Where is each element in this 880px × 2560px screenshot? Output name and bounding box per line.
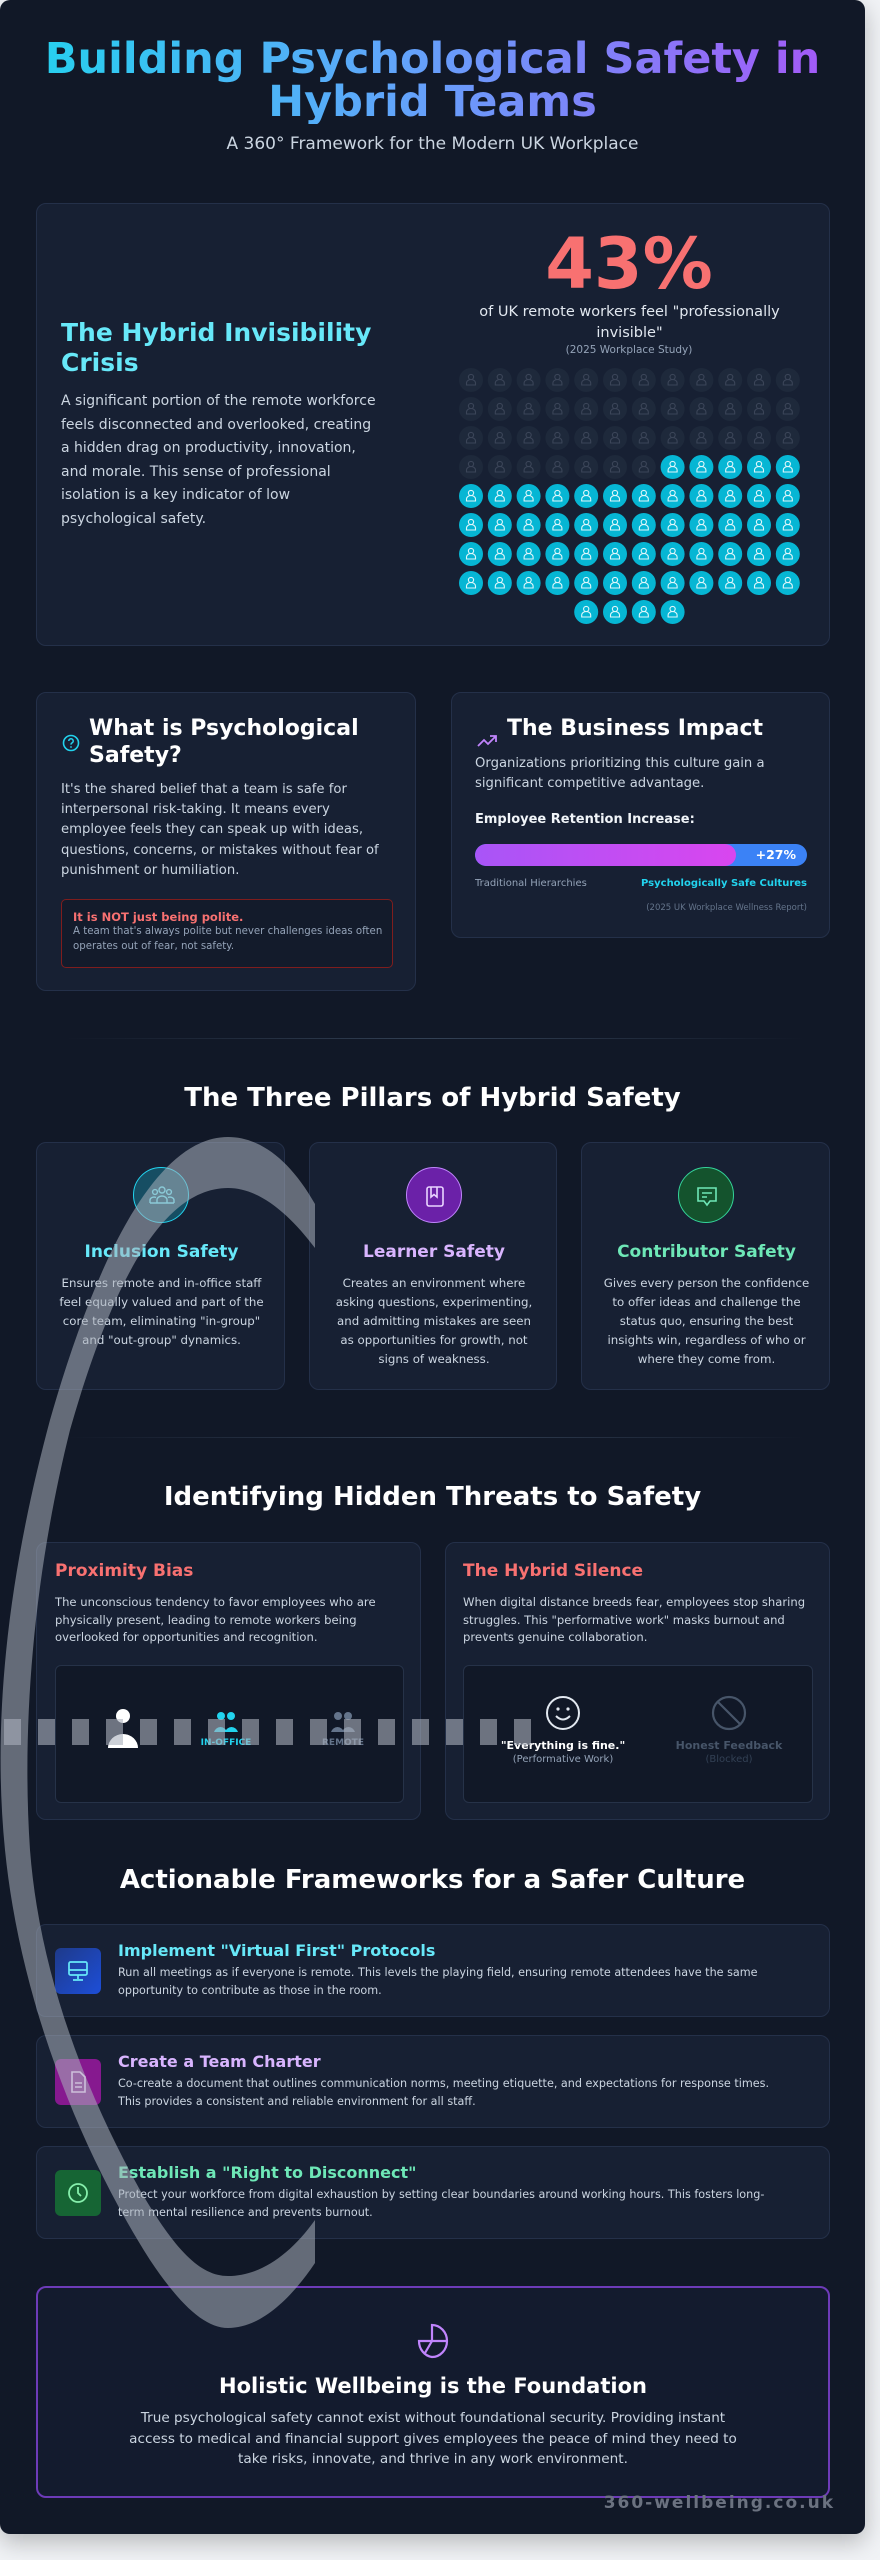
- bar labels: Psychologically Safe Cultures: [641, 878, 807, 889]
- text: True psychological safety cannot exist without foundational security. Providing instant: [141, 2410, 725, 2426]
- icon: blocked: Honest Feedback: [676, 1739, 782, 1752]
- heading: hidden threats: Identifying Hidden Threats to Safety: [164, 1482, 701, 1512]
- bar labels: [474, 878, 807, 889]
- stat: 43%: 43%: [545, 223, 713, 305]
- subtitle: A 360° Framework for the Modern UK Workplace: [227, 134, 638, 154]
- heading: The Hybrid Silence: [463, 1561, 643, 1581]
- panel: virtual first: [36, 1924, 830, 2017]
- panel: invisibility crisis: [36, 203, 830, 646]
- title: Implement "Virtual First" Protocols: [118, 1941, 435, 1960]
- icon: manager: [108, 1709, 138, 1748]
- text: crisis body: psychological safety.: [61, 510, 206, 526]
- text: crisis body: and morale. This sense of professional: [61, 464, 331, 480]
- source: (2025 UK Workplace Wellness Report): [646, 903, 807, 913]
- title: Inclusion Safety: [85, 1242, 238, 1262]
- icon: smiley: (Performative Work): [513, 1754, 613, 1765]
- icon: remote: REMOTE: [322, 1738, 364, 1748]
- heading: actionable frameworks: Actionable Frameworks for a Safer Culture: [120, 1865, 745, 1895]
- icon: book: [406, 1167, 462, 1223]
- text: crisis body: isolation is a key indicator of low: [61, 487, 290, 503]
- panel: contributor safety: [581, 1142, 830, 1390]
- panel: business impact: [451, 692, 830, 938]
- icon: remote: [322, 1712, 364, 1748]
- title: Learner Safety: [363, 1242, 505, 1262]
- icon: pie: [418, 2324, 448, 2358]
- icon: in-office: [201, 1712, 251, 1748]
- heading: invisibility crisis: The Hybrid Invisibility Crisis: [61, 318, 371, 377]
- text: crisis body: [61, 393, 376, 526]
- text: definition: It's the shared belief that a team is safe for interpersonal risk-taking. It means every employee feels they can speak up with ideas, questions, concerns, or mistakes without fear of punishment or humiliation.: [61, 782, 379, 878]
- title: Contributor Safety: [617, 1242, 796, 1262]
- bar labels: Traditional Hierarchies: [475, 878, 587, 889]
- panel: hybrid silence: [445, 1542, 830, 1820]
- text: access to medical and financial support gives employees the peace of mind they need to: [129, 2430, 737, 2446]
- decoration: dashed line: [4, 1719, 531, 1745]
- icon: blocked: (Blocked): [706, 1754, 752, 1765]
- text: take risks, innovate, and thrive in any work environment.: [238, 2451, 628, 2467]
- text: [118, 1966, 758, 1996]
- panel: holistic wellbeing: [36, 2286, 830, 2498]
- text: crisis body: a hidden drag on productivity, innovation,: [61, 440, 356, 456]
- label: retention: Employee Retention Increase:: [475, 812, 695, 827]
- panel: team charter: [36, 2035, 830, 2128]
- panel: inclusion safety: [36, 1142, 285, 1390]
- icon: smiley: [501, 1696, 625, 1765]
- icon: people: [133, 1167, 189, 1223]
- panel: learner safety: [309, 1142, 557, 1390]
- text: Protect your workforce from digital exhaustion by setting clear boundaries around working hours. This fosters long-: [118, 2188, 764, 2201]
- text: Co-create a document that outlines communication norms, meeting etiquette, and expectations for response times.: [118, 2077, 769, 2090]
- panel: proximity bias: [36, 1542, 421, 1820]
- text: When digital distance breeds fear, employees stop sharing struggles. This "performative work" masks burnout and prevents genuine collaboration.: [463, 1595, 805, 1644]
- heading: The Business Impact: [507, 716, 763, 741]
- icon: smiley: "Everything is fine.": [501, 1739, 625, 1752]
- stat source: (2025 Workplace Study): [566, 344, 692, 356]
- callout: not just polite: operates out of fear, not safety.: [73, 940, 234, 952]
- bar chart: retention: +27%: [756, 847, 796, 862]
- stat caption: of UK remote workers feel "professionally invisible": [479, 304, 780, 341]
- icon: monitor: [55, 1948, 101, 1994]
- bar chart: retention: [475, 844, 807, 866]
- text: Ensures remote and in-office staff feel equally valued and part of the core team, eliminating "in-group" and "out-group" dynamics.: [59, 1276, 264, 1347]
- icon: clock: [55, 2170, 101, 2216]
- icon: message: [678, 1167, 734, 1223]
- panel: right to disconnect: [36, 2146, 830, 2239]
- callout: not just polite: A team that's always polite but never challenges ideas often: [73, 926, 382, 937]
- panel: what is psychological safety: [36, 692, 416, 991]
- text: Creates an environment where asking questions, experimenting, and admitting mistakes are seen as opportunities for growth, not signs of weakness.: [336, 1276, 532, 1366]
- icon: question circle: [62, 734, 80, 752]
- text: The unconscious tendency to favor employees who are physically present, leading to remote workers being overlooked for opportunities and recognition.: [55, 1595, 376, 1644]
- text: Organizations prioritizing this culture gain a significant competitive advantage.: [475, 756, 765, 791]
- icon: blocked: [676, 1696, 782, 1765]
- diagram: silence: [463, 1665, 813, 1803]
- title: Holistic Wellbeing is the Foundation: [219, 2374, 647, 2398]
- icon: trending arrow: [477, 735, 497, 747]
- chart: waffle 43 of 100: [459, 368, 800, 624]
- text: [118, 2188, 764, 2218]
- heading: What is Psychological Safety?: [89, 716, 359, 768]
- diagram: proximity: [55, 1665, 404, 1803]
- text: crisis body: A significant portion of the remote workforce: [61, 393, 376, 409]
- text: term mental resilience and prevents burnout.: [118, 2206, 373, 2218]
- heading: three pillars: The Three Pillars of Hybrid Safety: [184, 1083, 681, 1113]
- icon: in-office: IN-OFFICE: [201, 1738, 251, 1748]
- text: Gives every person the confidence to offer ideas and challenge the status quo, ensuring the best insights win, regardless of who or where they come from.: [604, 1276, 809, 1366]
- title: Building Psychological Safety in Hybrid Teams: [45, 34, 820, 127]
- text: opportunity to contribute as those in the room.: [118, 1984, 382, 1996]
- text: This provides a consistent and reliable environment for all staff.: [118, 2094, 476, 2108]
- heading: Proximity Bias: [55, 1561, 193, 1581]
- text: [129, 2410, 737, 2467]
- title: Create a Team Charter: [118, 2052, 321, 2071]
- text: crisis body: feels disconnected and overlooked, creating: [61, 416, 371, 432]
- text: [118, 2077, 769, 2108]
- footer: website: 360-wellbeing.co.uk: [604, 2493, 835, 2513]
- icon: document: [55, 2059, 101, 2105]
- text: Run all meetings as if everyone is remote. This levels the playing field, ensuring remote attendees have the same: [118, 1966, 758, 1979]
- callout: not just polite: [61, 899, 393, 968]
- title: Establish a "Right to Disconnect": [118, 2163, 416, 2182]
- callout: not just polite: It is NOT just being polite.: [73, 910, 243, 924]
